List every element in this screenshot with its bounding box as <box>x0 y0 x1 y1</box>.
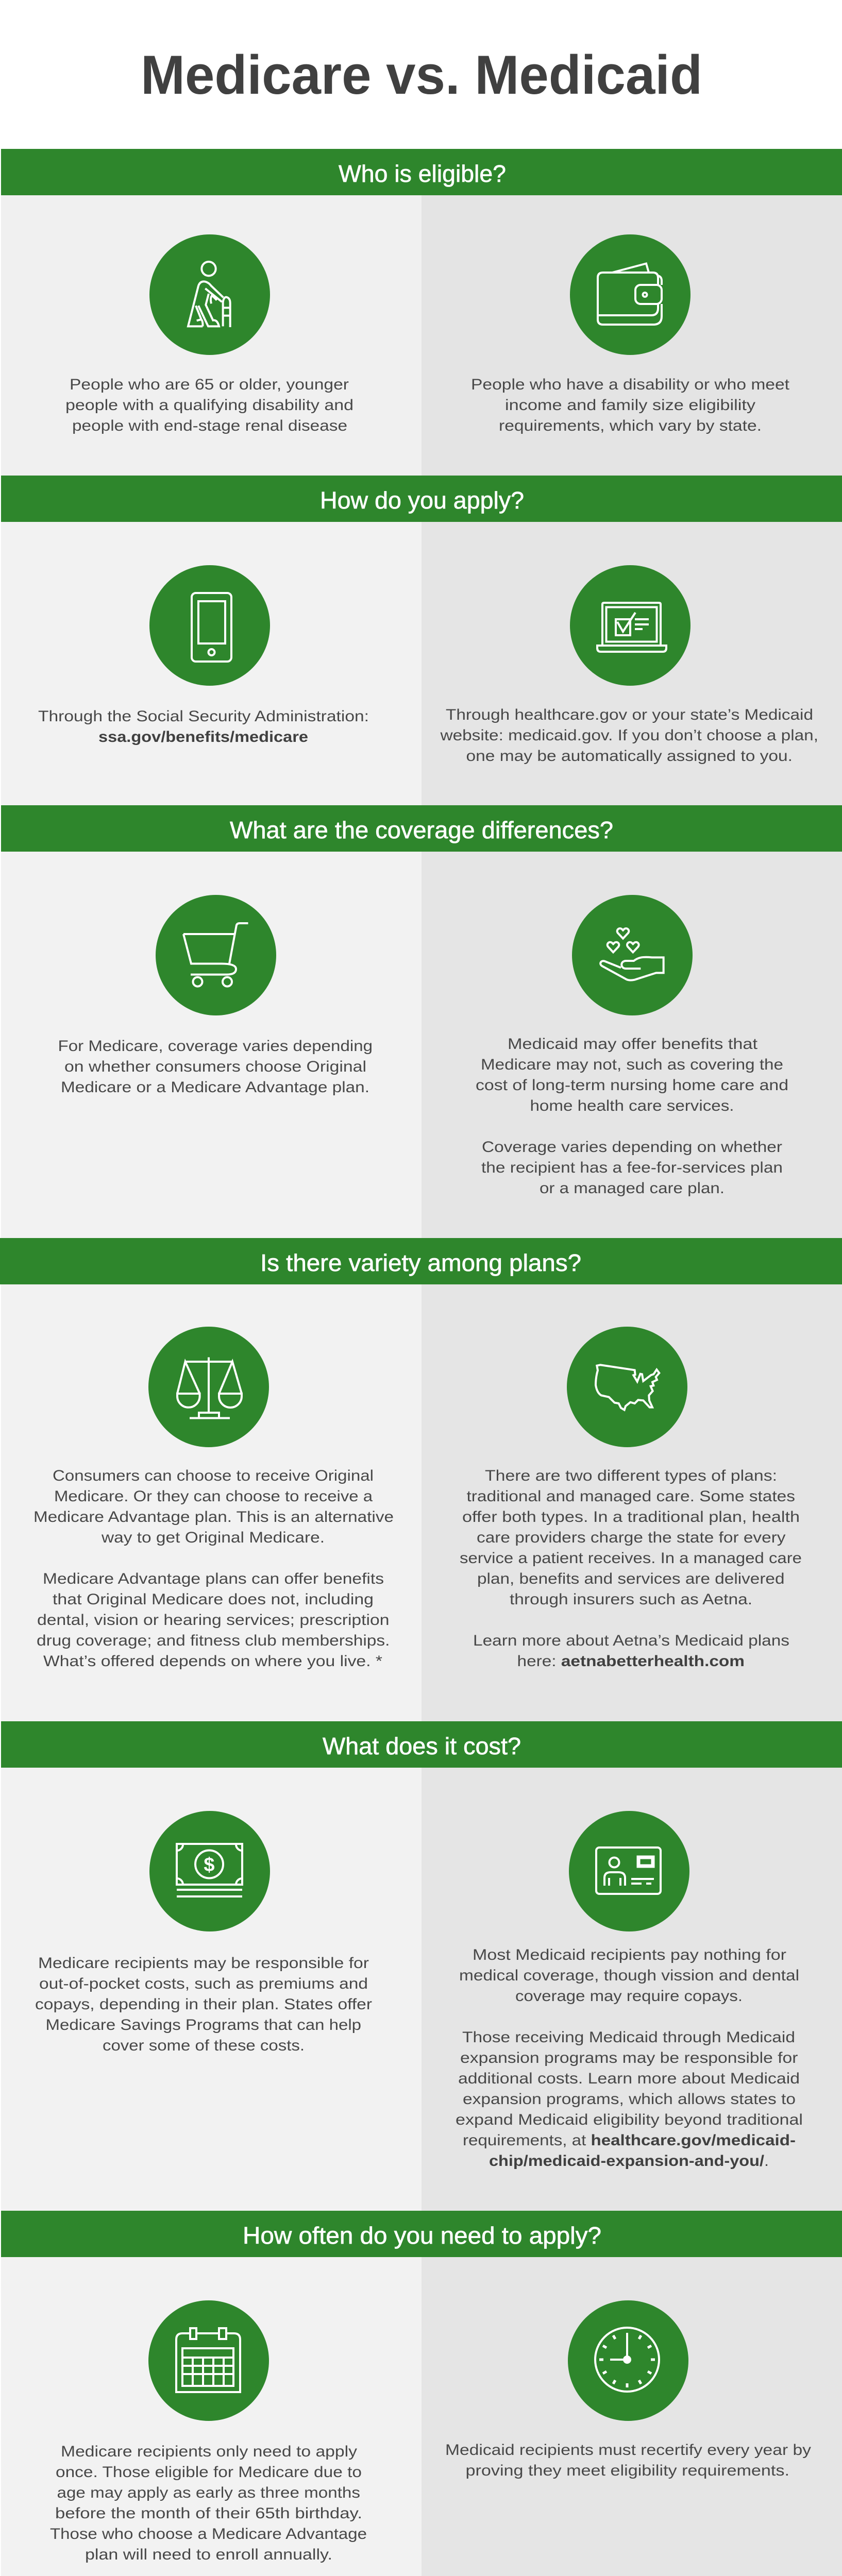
heading band: how do you apply <box>1 476 842 522</box>
section: who is eligible <box>1 149 842 476</box>
text: plan will need to enroll annually. <box>85 2546 332 2563</box>
panel: Medicare plan variety <box>1 1284 422 1721</box>
text: traditional and managed care. Some states <box>467 1488 795 1505</box>
text: service a patient receives. In a managed care <box>460 1550 802 1567</box>
panel: Medicaid recertification <box>422 2257 842 2576</box>
text: once. Those eligible for Medicare due to <box>56 2464 362 2481</box>
panel: Medicare application <box>1 522 422 805</box>
text <box>50 2443 367 2563</box>
text: plan, benefits and services are delivered <box>477 1570 784 1587</box>
text: coverage may require copays. <box>515 1988 743 2005</box>
icon: shopping cart <box>183 923 248 987</box>
panel: Medicare coverage <box>1 852 422 1238</box>
text: way to get Original Medicare. <box>101 1529 325 1546</box>
icon: stack of dollar bills: $ <box>204 1854 215 1876</box>
text: expand Medicaid eligibility beyond traditional <box>456 2111 803 2128</box>
text: drug coverage; and fitness club memberships. <box>37 1632 390 1649</box>
text: care providers charge the state for every <box>477 1529 785 1546</box>
text: Most Medicaid recipients pay nothing for <box>473 1946 786 1963</box>
text: Coverage varies depending on whether <box>482 1139 782 1156</box>
text: one may be automatically assigned to you. <box>466 748 793 765</box>
panel: Medicare application frequency <box>1 2257 422 2576</box>
text <box>33 1467 394 1670</box>
text: Medicare may not, such as covering the <box>481 1056 783 1073</box>
text: that Original Medicare does not, including <box>53 1591 374 1608</box>
text: requirements, at healthcare.gov/medicaid- <box>463 2132 796 2149</box>
text <box>440 706 818 765</box>
heading band: how do you apply: How do you apply? <box>320 487 524 514</box>
heading band: variety among plans: Is there variety among plans? <box>260 1249 581 1276</box>
text: out-of-pocket costs, such as premiums and <box>39 1975 368 1992</box>
text <box>476 1036 788 1197</box>
section: how do you apply <box>1 476 842 805</box>
heading band: who is eligible: Who is eligible? <box>339 160 506 187</box>
text: people with end-stage renal disease <box>72 417 347 434</box>
text: Through the Social Security Administration: <box>38 708 369 725</box>
text: Medicare Savings Programs that can help <box>45 2016 361 2033</box>
text: chip/medicaid-expansion-and-you/ . <box>489 2153 769 2170</box>
section: cost <box>1 1721 842 2211</box>
heading band: coverage differences <box>1 805 842 852</box>
text: What’s offered depends on where you live. * <box>43 1653 382 1670</box>
text: Medicaid recipients must recertify every year by <box>445 2442 811 2459</box>
text <box>35 1955 372 2054</box>
text: age may apply as early as three months <box>57 2484 360 2501</box>
text: Medicare. Or they can choose to receive a <box>54 1488 373 1505</box>
heading band: how often to apply: How often do you need to apply? <box>243 2222 601 2249</box>
heading band: who is eligible <box>1 149 842 195</box>
icon: older person with walker <box>188 262 230 327</box>
text: cost of long-term nursing home care and <box>476 1077 788 1094</box>
heading band: cost: What does it cost? <box>323 1733 521 1759</box>
icon: wallet <box>598 264 662 325</box>
panel: Medicare cost <box>1 1768 422 2211</box>
heading band: how often to apply <box>1 2211 842 2257</box>
title: Medicare vs. Medicaid <box>141 44 702 106</box>
icon: stack of dollar bills <box>177 1844 242 1896</box>
text <box>38 708 369 745</box>
icon: map of the United States <box>596 1365 659 1410</box>
text: website: medicaid.gov. If you don’t choose a plan, <box>440 727 818 744</box>
panel: Medicaid application <box>422 522 842 805</box>
icon: clock <box>595 2328 659 2392</box>
text: people with a qualifying disability and <box>65 397 353 414</box>
text: income and family size eligibility <box>505 397 755 414</box>
text: additional costs. Learn more about Medicaid <box>458 2070 800 2087</box>
section: coverage differences <box>1 805 842 1238</box>
text: Medicare recipients may be responsible for <box>38 1955 369 1972</box>
text <box>445 2442 811 2479</box>
panel: Medicaid plan variety <box>422 1284 842 1721</box>
text: Medicaid may offer benefits that <box>508 1036 758 1053</box>
panel: Medicaid eligibility <box>422 195 842 476</box>
panel: Medicaid cost <box>422 1768 842 2211</box>
text: Medicare recipients only need to apply <box>61 2443 357 2460</box>
text: expansion programs may be responsible for <box>460 2049 798 2066</box>
text <box>65 376 353 434</box>
text: or a managed care plan. <box>540 1180 725 1197</box>
text: dental, vision or hearing services; prescription <box>37 1612 390 1629</box>
text: Those who choose a Medicare Advantage <box>50 2526 367 2543</box>
text: before the month of their 65th birthday. <box>55 2505 362 2522</box>
text: requirements, which vary by state. <box>499 417 762 434</box>
icon: calendar <box>176 2328 240 2392</box>
text: on whether consumers choose Original <box>64 1058 366 1075</box>
icon: hand with hearts <box>600 928 664 980</box>
icon: balance scales <box>177 1357 242 1418</box>
heading band: coverage differences: What are the coverage differences? <box>230 817 613 843</box>
text: Consumers can choose to receive Original <box>53 1467 374 1484</box>
text: offer both types. In a traditional plan, health <box>462 1509 800 1526</box>
text: the recipient has a fee-for-services plan <box>481 1159 783 1176</box>
section: variety among plans <box>0 1238 842 1721</box>
text: ssa.gov/benefits/medicare <box>98 728 308 745</box>
text: Medicare or a Medicare Advantage plan. <box>61 1079 369 1096</box>
panel: Medicaid coverage <box>422 852 842 1238</box>
heading band: variety among plans <box>0 1238 842 1284</box>
text: copays, depending in their plan. States offer <box>35 1996 372 2013</box>
text: Medicare Advantage plan. This is an alternative <box>33 1509 394 1526</box>
section: how often to apply <box>1 2211 842 2576</box>
text: Learn more about Aetna’s Medicaid plans <box>473 1632 789 1649</box>
text: cover some of these costs. <box>103 2037 305 2054</box>
icon: laptop with checklist <box>597 603 666 652</box>
panel: Medicare eligibility <box>1 195 422 476</box>
text: medical coverage, though vission and dental <box>459 1967 799 1984</box>
text: Through healthcare.gov or your state’s Medicaid <box>446 706 813 723</box>
text: here: aetnabetterhealth.com <box>517 1653 745 1670</box>
text: Medicare Advantage plans can offer benefits <box>43 1570 384 1587</box>
icon: smartphone <box>192 593 231 662</box>
text <box>460 1467 802 1670</box>
text: People who are 65 or older, younger <box>70 376 349 393</box>
text: through insurers such as Aetna. <box>510 1591 752 1608</box>
text: People who have a disability or who meet <box>471 376 790 393</box>
text: proving they meet eligibility requirements. <box>466 2462 789 2479</box>
text: Those receiving Medicaid through Medicaid <box>462 2029 795 2046</box>
text: home health care services. <box>530 1097 734 1114</box>
text <box>58 1038 373 1096</box>
text: For Medicare, coverage varies depending <box>58 1038 373 1055</box>
text: There are two different types of plans: <box>485 1467 777 1484</box>
text <box>471 376 790 434</box>
heading band: cost <box>1 1721 842 1768</box>
text <box>456 1946 803 2170</box>
text: expansion programs, which allows states to <box>463 2091 796 2108</box>
icon: member ID card <box>596 1848 661 1894</box>
